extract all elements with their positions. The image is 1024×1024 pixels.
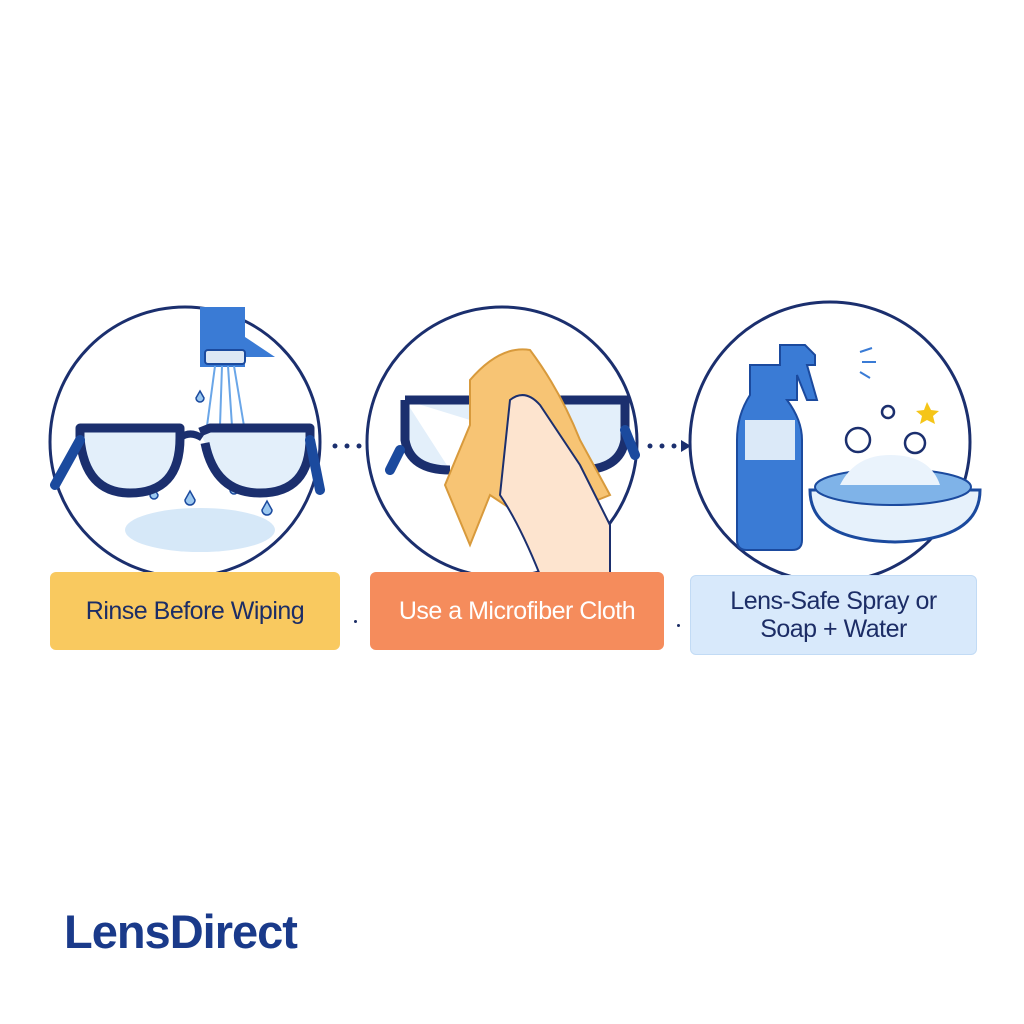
label 3: Soap + Water [760,615,907,643]
arrow 1 [332,440,376,452]
circle 1: rinse [50,307,320,577]
label 2: Use a Microfiber Cloth [399,597,635,625]
label 1 [50,572,340,650]
label 3 [690,575,977,655]
label 3: Lens-Safe Spray or [730,587,937,615]
dot 1 [354,620,357,623]
arrow 2 [648,440,691,452]
dot 2 [677,624,680,627]
label 1: Rinse Before Wiping [86,597,304,625]
circle 3: spray and soap [690,302,980,582]
label 2 [370,572,664,650]
circle 2: microfiber cloth [367,307,637,577]
logo: LensDirect [64,905,297,958]
